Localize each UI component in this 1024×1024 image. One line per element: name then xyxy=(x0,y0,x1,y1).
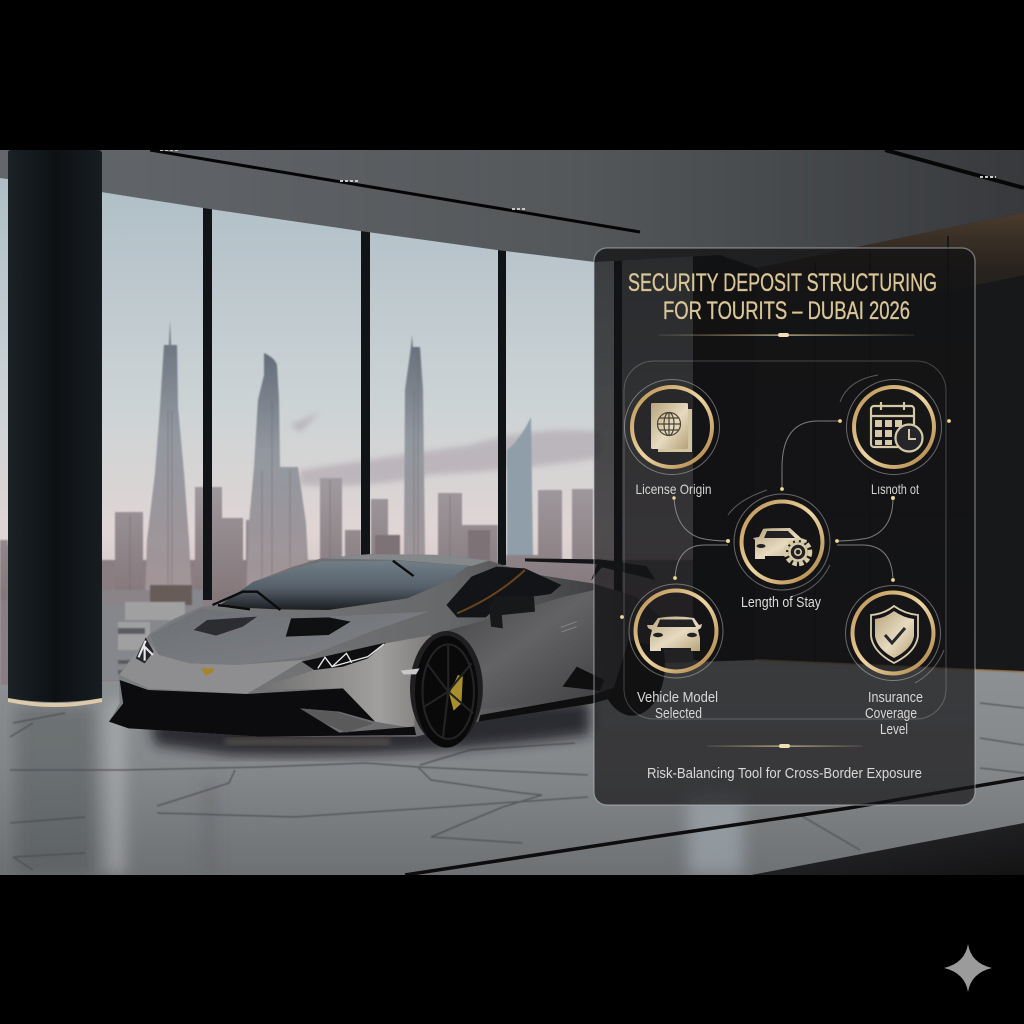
door xyxy=(430,590,594,677)
structural column xyxy=(694,660,700,661)
label: vehicle model selected: Vehicle Model xyxy=(637,690,718,706)
window mullions xyxy=(203,208,622,600)
bottom divider xyxy=(707,744,863,748)
marble floor xyxy=(0,660,1024,875)
label: insurance coverage level: Level xyxy=(880,722,908,738)
hood vent right xyxy=(286,617,351,637)
front bumper upper xyxy=(120,638,304,694)
window reflection xyxy=(457,570,525,613)
photo scene: showroom xyxy=(0,150,1024,875)
lower bumper xyxy=(109,680,416,737)
headlight right xyxy=(302,643,386,670)
label: insurance coverage level xyxy=(865,690,923,738)
hood xyxy=(150,608,429,665)
front fender xyxy=(284,636,432,727)
label: license origin: License Origin xyxy=(636,481,712,497)
fender marker xyxy=(401,668,420,674)
rim spokes xyxy=(422,644,474,739)
title xyxy=(628,269,937,325)
warm shadow glow xyxy=(225,738,390,745)
icon: car with gear xyxy=(728,490,830,597)
label: vehicle model selected xyxy=(637,690,718,722)
icon: sparkle watermark xyxy=(944,944,992,992)
floor seam xyxy=(405,778,1024,875)
door handle xyxy=(561,622,577,632)
splitter fin xyxy=(300,708,373,733)
warm wood wall top xyxy=(854,212,1024,285)
floor reflections xyxy=(15,700,743,875)
headlight left xyxy=(136,637,154,663)
warm floor edge xyxy=(755,660,1024,672)
car shadow xyxy=(150,700,590,756)
rear wing xyxy=(525,558,655,581)
label: insurance coverage level: Coverage xyxy=(865,706,917,722)
label: insurance coverage level: Insurance xyxy=(868,690,923,706)
side intake xyxy=(562,667,604,691)
car body xyxy=(109,554,671,737)
icon: license origin passport xyxy=(624,380,720,474)
marble cracks xyxy=(10,703,1024,870)
hood vent left xyxy=(194,617,257,636)
roof xyxy=(321,554,489,566)
inner frame xyxy=(624,361,946,719)
title divider xyxy=(658,333,914,337)
Dubai skyline xyxy=(0,320,700,690)
side window xyxy=(446,567,561,617)
icon: insurance shield xyxy=(846,586,944,683)
label: garbled length: Lısnoth ot xyxy=(871,481,919,497)
connectors xyxy=(674,421,893,580)
connector dots xyxy=(620,419,951,619)
wall panels xyxy=(870,236,949,256)
icon: calendar with clock xyxy=(840,375,942,474)
tower detail lines xyxy=(130,391,450,585)
rear wheel xyxy=(608,640,665,716)
label: length of stay: Length of Stay xyxy=(741,595,822,611)
ceiling seams xyxy=(150,150,1024,232)
glass info panel xyxy=(594,248,975,805)
side sill xyxy=(479,688,611,722)
badge xyxy=(201,668,214,676)
icon: vehicle model xyxy=(629,584,723,678)
headlight strokes xyxy=(318,644,384,668)
brake caliper xyxy=(449,675,463,711)
title: FOR TOURITS – DUBAI 2026 xyxy=(663,297,910,325)
footer caption: Risk-Balancing Tool for Cross-Border Exposure xyxy=(647,765,922,782)
windshield xyxy=(218,561,468,610)
dark floor corner xyxy=(751,823,1024,875)
tinted pane behind panel xyxy=(622,255,693,675)
dark right wall xyxy=(975,275,1024,671)
window sky xyxy=(0,170,700,690)
pillar base light xyxy=(8,698,102,707)
label: vehicle model selected: Selected xyxy=(655,706,702,722)
sports car xyxy=(109,554,671,748)
ceiling xyxy=(0,150,1024,268)
clouds xyxy=(290,412,600,486)
panel background xyxy=(594,248,975,805)
windshield wiper and pillar xyxy=(212,561,414,610)
mirror xyxy=(489,597,535,628)
wheel arch xyxy=(410,631,483,746)
front tyre xyxy=(415,636,478,748)
pillar xyxy=(8,150,102,702)
